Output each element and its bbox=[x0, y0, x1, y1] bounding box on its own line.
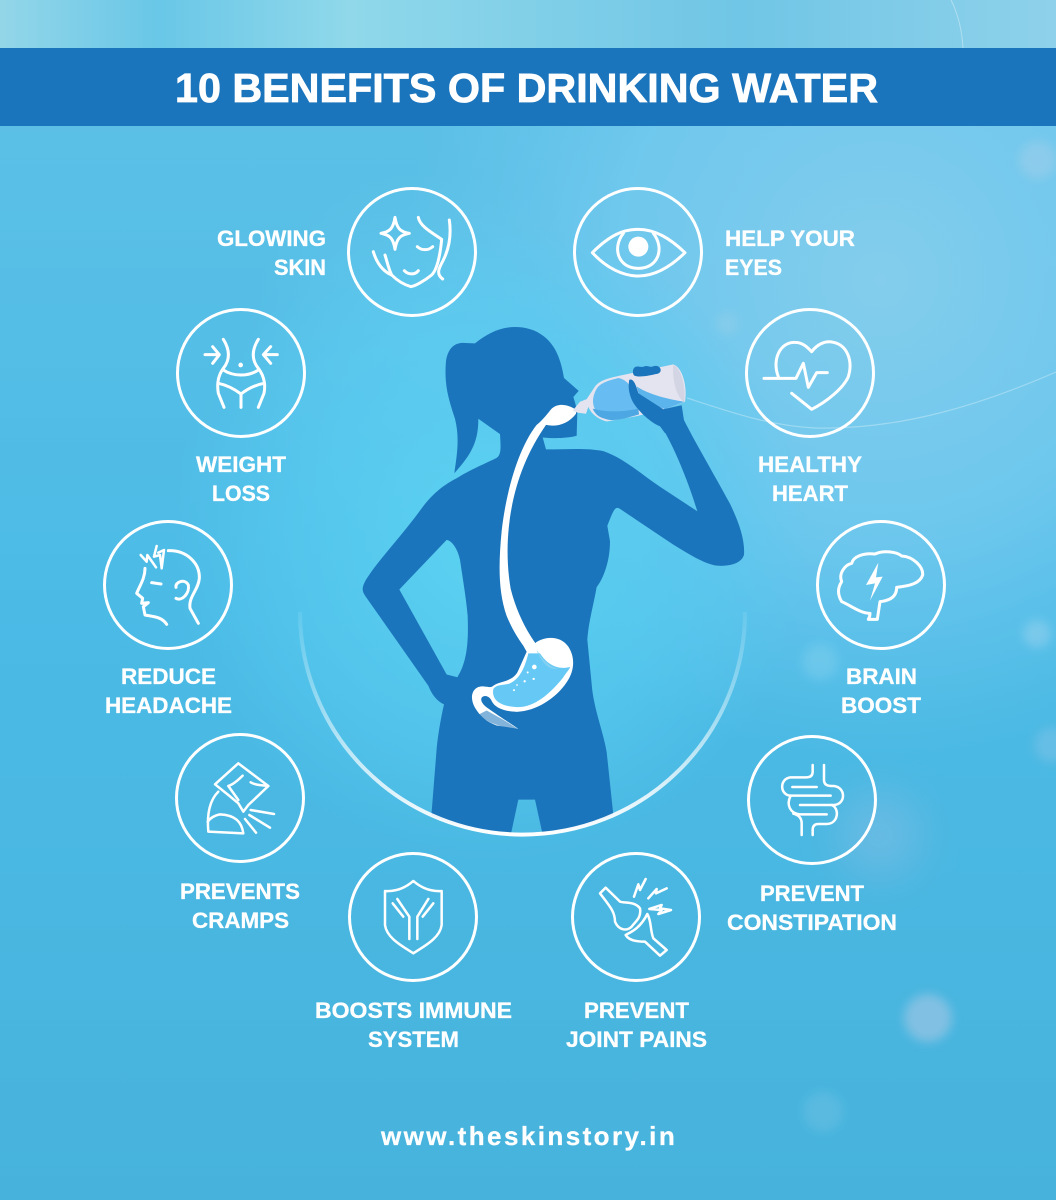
icon: head bbox=[104, 522, 232, 648]
label: help your eyes: HELP YOUR bbox=[725, 226, 855, 251]
benefit: prevents cramps bbox=[176, 734, 304, 933]
label: glowing skin: SKIN bbox=[274, 255, 326, 280]
icon: leg cramp bbox=[176, 734, 304, 862]
label: glowing skin: GLOWING bbox=[217, 226, 326, 251]
icon: shield bbox=[350, 854, 476, 980]
icon: joint bbox=[572, 854, 700, 980]
label: reduce headache: HEADACHE bbox=[105, 693, 232, 718]
header band bbox=[0, 48, 1056, 126]
icon: brain bbox=[818, 522, 944, 648]
icon: heart bbox=[746, 310, 874, 436]
label: weight loss: LOSS bbox=[212, 481, 270, 506]
label: brain boost: BOOST bbox=[841, 693, 922, 718]
icon: glowing skin bbox=[348, 188, 476, 316]
website url: www.theskinstory.in bbox=[380, 1121, 677, 1151]
label: brain boost: BRAIN bbox=[846, 664, 917, 689]
benefit: weight loss bbox=[178, 310, 304, 506]
stomach bbox=[472, 638, 573, 729]
label: prevent constipation: PREVENT bbox=[760, 881, 865, 906]
icon: waist bbox=[178, 310, 304, 436]
benefit: help your eyes bbox=[574, 188, 855, 316]
esophagus bbox=[500, 405, 576, 645]
label: prevent constipation: CONSTIPATION bbox=[727, 910, 897, 935]
benefit: prevent joint pains bbox=[566, 854, 707, 1052]
label: boosts immune system: SYSTEM bbox=[368, 1027, 459, 1052]
label: reduce headache: REDUCE bbox=[121, 664, 216, 689]
silhouette figure drinking water bbox=[363, 327, 744, 835]
benefit: boosts immune system bbox=[315, 854, 512, 1052]
label: boosts immune system: BOOSTS IMMUNE bbox=[315, 998, 512, 1023]
label: prevent joint pains: PREVENT bbox=[584, 998, 690, 1023]
icon: intestine bbox=[748, 736, 876, 864]
benefit: healthy heart bbox=[746, 310, 874, 506]
label: healthy heart: HEALTHY bbox=[758, 452, 862, 477]
benefit: brain boost bbox=[818, 522, 944, 718]
water bottle bbox=[573, 364, 686, 422]
label: healthy heart: HEART bbox=[772, 481, 849, 506]
large circle arc bbox=[300, 612, 745, 835]
label: help your eyes: EYES bbox=[725, 255, 782, 280]
title: 10 BENEFITS OF DRINKING WATER bbox=[175, 65, 878, 111]
icon: eye bbox=[574, 188, 702, 316]
benefit: reduce headache bbox=[104, 522, 232, 718]
hand holding bottle bbox=[629, 366, 684, 433]
label: prevents cramps: CRAMPS bbox=[192, 908, 289, 933]
label: prevents cramps: PREVENTS bbox=[180, 879, 300, 904]
label: weight loss: WEIGHT bbox=[196, 452, 287, 477]
woman silhouette bbox=[363, 327, 744, 835]
benefit: glowing skin bbox=[217, 188, 476, 316]
benefit: prevent constipation bbox=[727, 736, 897, 935]
label: prevent joint pains: JOINT PAINS bbox=[566, 1027, 707, 1052]
